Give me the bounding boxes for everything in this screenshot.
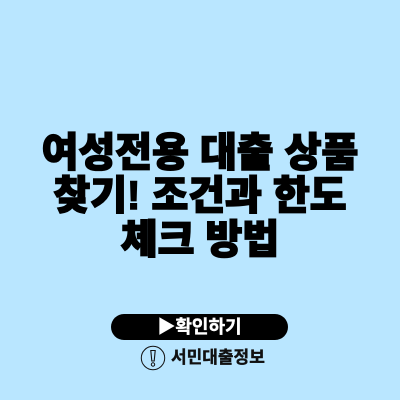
button: confirm: [111, 314, 288, 340]
icon: exclamation circle: [140, 346, 166, 370]
button: confirm: ▶확인하기: [157, 317, 242, 337]
brand label: 서민대출정보: [171, 348, 265, 367]
title: 체크 방법: [121, 218, 279, 262]
title: 여성전용 대출 상품: [42, 131, 358, 175]
title: [42, 131, 358, 262]
title: 찾기! 조건과 한도: [53, 174, 347, 218]
